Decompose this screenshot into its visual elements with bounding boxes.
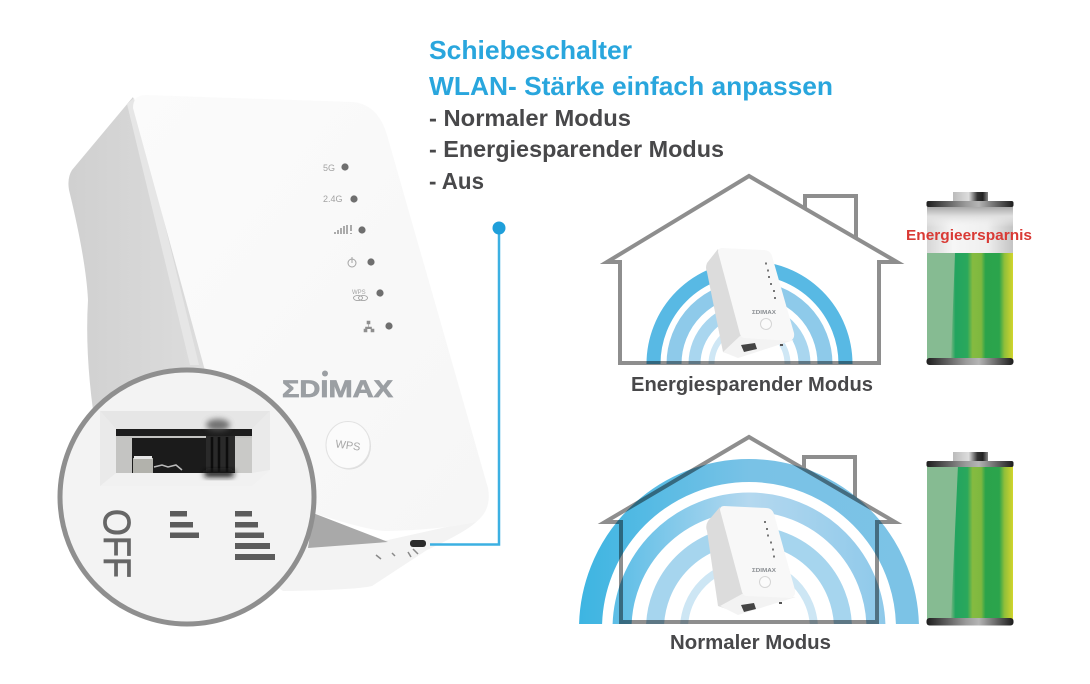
small device: ΣDIMAX xyxy=(752,568,776,574)
mode list: - Normaler Modus xyxy=(429,105,631,131)
small device xyxy=(706,248,794,358)
small device xyxy=(706,506,796,615)
panel: power saving house xyxy=(607,176,897,396)
house outline xyxy=(605,437,895,622)
mode label: Normaler Modus xyxy=(670,632,831,654)
house outline xyxy=(607,176,897,363)
off label: OFF xyxy=(95,509,137,578)
wifi arcs xyxy=(579,459,919,624)
title: WLAN- Stärke einfach anpassen xyxy=(429,71,833,101)
status leds: 2.4G xyxy=(323,194,343,204)
energy saving label: Energieersparnis xyxy=(906,227,1032,244)
switch recess xyxy=(100,411,270,486)
underside switch xyxy=(376,540,426,559)
wifi arcs xyxy=(654,268,846,364)
battery: normal mode xyxy=(926,452,1014,626)
device front xyxy=(133,95,489,531)
mode list: - Energiesparender Modus xyxy=(429,136,724,162)
switch slot xyxy=(116,419,252,477)
brand logo xyxy=(282,370,393,403)
title: Schiebeschalter xyxy=(429,35,632,65)
main device: wifi extender xyxy=(68,95,489,591)
brand logo: ΣDIMAX xyxy=(282,376,393,403)
wps button: WPS xyxy=(335,438,361,454)
status leds: 5G xyxy=(323,163,335,173)
status leds xyxy=(323,163,393,332)
mode list xyxy=(429,105,724,194)
battery: power saving xyxy=(906,192,1032,365)
low power bars xyxy=(170,511,199,538)
mode list: - Aus xyxy=(429,168,484,194)
status leds: WPS xyxy=(352,290,366,296)
panel: normal mode house xyxy=(590,437,908,684)
title xyxy=(429,35,833,101)
wps button xyxy=(326,422,371,470)
small device: ΣDIMAX xyxy=(752,310,776,316)
full power bars xyxy=(235,511,275,560)
device side panel xyxy=(68,97,240,560)
device underside xyxy=(240,520,478,591)
magnified switch circle xyxy=(60,370,314,624)
connector line with dot xyxy=(430,222,506,544)
mode label: Energiesparender Modus xyxy=(631,374,873,396)
